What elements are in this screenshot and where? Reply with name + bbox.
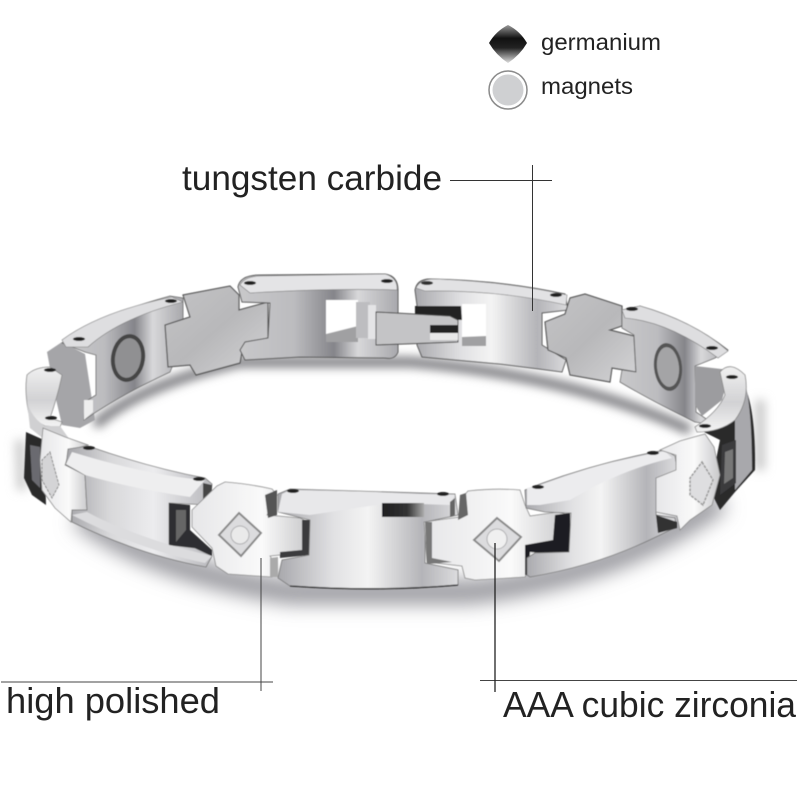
icon: right side gem bbox=[690, 462, 713, 505]
icon: front left gem bbox=[219, 513, 261, 556]
link: front right long bbox=[525, 450, 677, 577]
link: back top left with window bbox=[238, 274, 398, 360]
link: front center long bbox=[278, 489, 458, 589]
callout: tungsten carbide bbox=[182, 159, 552, 311]
legend bbox=[489, 25, 661, 109]
link: back right cross bbox=[545, 294, 636, 382]
link: back right with magnet bbox=[620, 306, 730, 425]
icon: left diamond gem bbox=[42, 452, 59, 498]
link: far right outer bbox=[695, 367, 755, 510]
icon: germanium bbox=[489, 25, 527, 63]
link: right diamond bbox=[656, 434, 720, 530]
link: front left long bbox=[66, 446, 212, 567]
callout: high polished bbox=[1, 558, 273, 721]
icon: front right gem bbox=[474, 518, 521, 561]
link: front right diamond bbox=[424, 489, 570, 580]
link: far left outer dark bbox=[24, 392, 70, 505]
link: far left back bbox=[26, 342, 95, 428]
callout: high polished: high polished bbox=[6, 680, 220, 721]
bracelet shadow bbox=[20, 362, 760, 592]
callout: AAA cubic zirconia: AAA cubic zirconia bbox=[503, 684, 797, 725]
link: clasp tongue bbox=[376, 306, 462, 345]
germanium label: germanium bbox=[541, 29, 661, 55]
callout: tungsten carbide: tungsten carbide bbox=[182, 159, 442, 198]
link: back left with magnet bbox=[62, 296, 183, 420]
magnets label: magnets bbox=[541, 73, 633, 99]
link: far left diamond bbox=[40, 428, 88, 522]
icon: magnets bbox=[489, 71, 527, 109]
link: back top right with window bbox=[415, 279, 568, 372]
link: front left diamond bbox=[192, 482, 310, 577]
bracelet bbox=[24, 274, 755, 589]
link: back left cross bbox=[165, 286, 268, 375]
